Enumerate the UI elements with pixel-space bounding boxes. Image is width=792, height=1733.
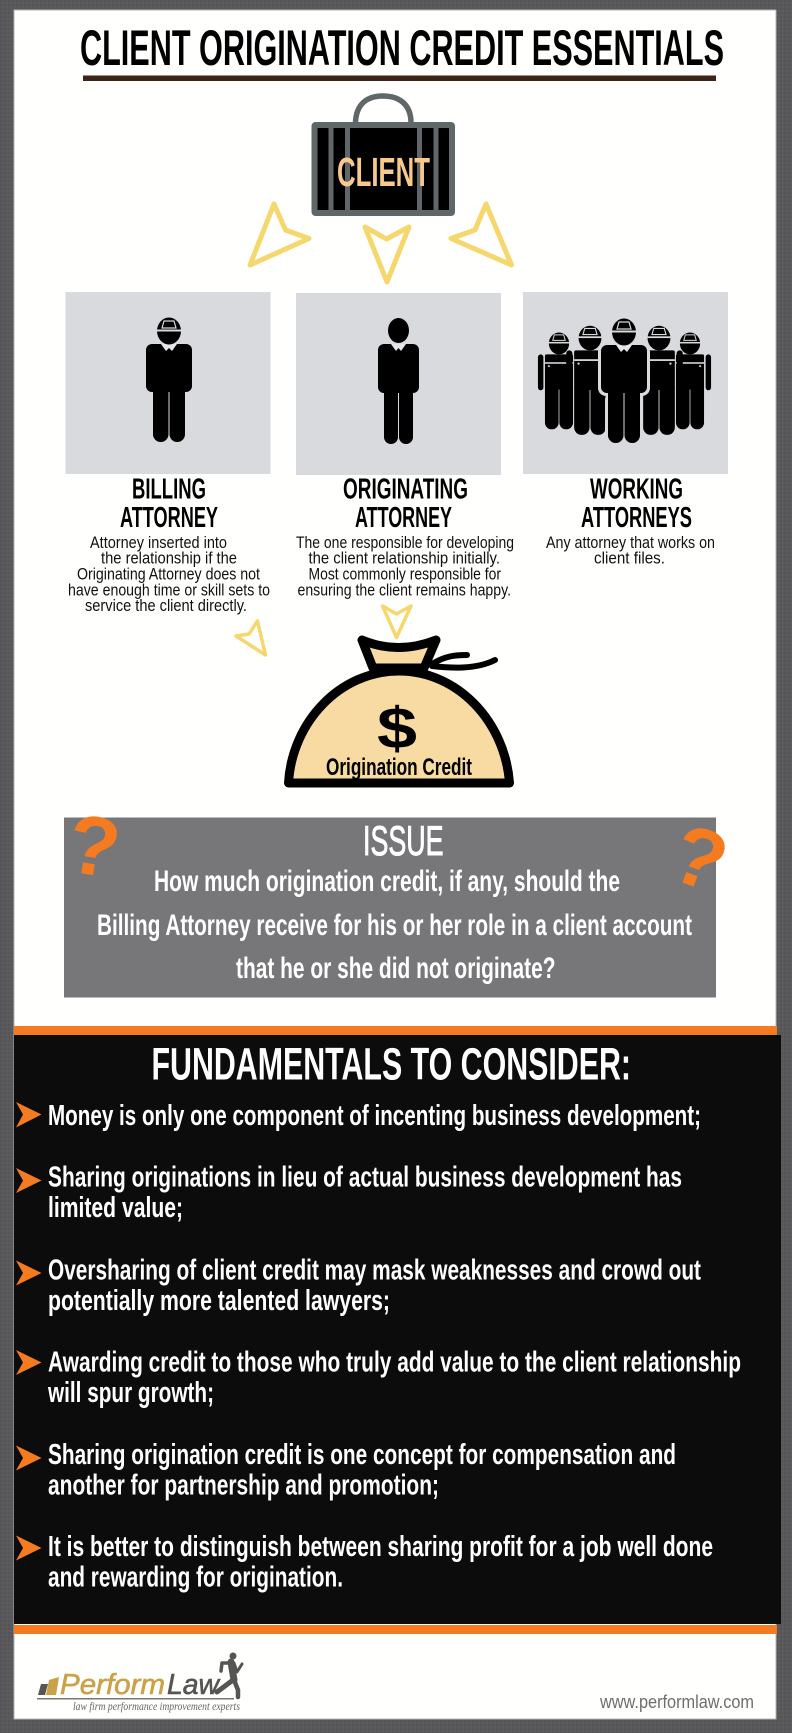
heading: working attorneys: ATTORNEYS <box>581 502 692 534</box>
heading: originating attorney: ORIGINATING <box>343 474 468 506</box>
top orange bar <box>14 1026 777 1035</box>
text: billing attorney description: have enough time or skill sets to <box>68 580 270 600</box>
text: originating attorney description: The one responsible for developing <box>296 533 514 552</box>
client label: CLIENT <box>337 149 430 195</box>
heading: working attorneys: WORKING <box>590 474 683 506</box>
text: issue question <box>97 865 692 985</box>
title rule <box>83 76 716 81</box>
heading: originating attorney <box>343 474 468 534</box>
text: billing attorney description <box>68 533 270 615</box>
text: issue question: that he or she did not originate? <box>236 952 556 985</box>
bullet 5 <box>16 1439 676 1502</box>
arrow: to billing attorney <box>250 204 309 265</box>
bullet 4: will spur growth; <box>47 1377 214 1409</box>
heading: working attorneys <box>581 474 692 534</box>
icon: right question mark: ? <box>659 805 740 911</box>
icon: client briefcase <box>314 96 452 213</box>
panel: working attorneys figures <box>523 292 728 474</box>
arrow: to originating attorney <box>365 227 409 282</box>
text: billing attorney description: the relationship if the <box>101 548 237 568</box>
text: originating attorney description <box>296 533 514 600</box>
bullet 4 <box>16 1346 741 1409</box>
text: originating attorney description: Most commonly responsible for <box>308 564 501 584</box>
text: working attorneys description <box>546 533 715 568</box>
logo: PerformLaw <box>37 1652 242 1713</box>
text: billing attorney description: Attorney inserted into <box>90 533 227 552</box>
website url: www.performlaw.com <box>599 1692 754 1712</box>
text: originating attorney description: the client relationship initially. <box>308 548 500 568</box>
panel: originating attorney figure <box>296 293 501 475</box>
text: working attorneys description: Any attorney that works on <box>546 533 715 552</box>
arrow: to working attorneys <box>451 204 512 265</box>
panel: billing attorney figure <box>66 292 270 474</box>
bullet 2 <box>16 1162 682 1224</box>
bullet 3 <box>16 1254 701 1317</box>
text: billing attorney description: service the client directly. <box>85 596 247 615</box>
bullet 2: limited value; <box>48 1192 183 1224</box>
heading: issue: ISSUE <box>363 817 444 864</box>
heading: billing attorney: ATTORNEY <box>120 502 218 534</box>
text: working attorneys description: client files. <box>594 548 665 568</box>
panel: issue <box>64 817 716 998</box>
bullet 6 <box>16 1531 713 1594</box>
text: originating attorney description: ensuring the client remains happy. <box>298 580 511 600</box>
logo: PerformLaw: Perform <box>60 1669 165 1701</box>
logo: PerformLaw: law firm performance improvement experts <box>73 1699 240 1713</box>
bullet 3: potentially more talented lawyers; <box>48 1285 390 1317</box>
icon: money bag <box>288 640 510 783</box>
bullet 6: and rewarding for origination. <box>48 1562 343 1594</box>
icon: runner <box>217 1652 242 1697</box>
arrow: originating attorney to credit <box>382 606 411 638</box>
arrow: billing attorney to credit <box>236 621 266 655</box>
dollar sign: $ <box>377 696 417 761</box>
heading: billing attorney <box>120 474 218 534</box>
logo: PerformLaw: Law <box>167 1669 221 1701</box>
origination credit label: Origination Credit <box>326 754 472 781</box>
icon: left question mark: ? <box>60 795 127 897</box>
bottom orange bar <box>14 1625 777 1634</box>
panel: fundamentals <box>14 1035 781 1624</box>
bullet 5: another for partnership and promotion; <box>48 1470 439 1502</box>
heading: billing attorney: BILLING <box>132 474 206 506</box>
text: billing attorney description: Originating Attorney does not <box>77 564 260 584</box>
heading: originating attorney: ATTORNEY <box>355 502 452 534</box>
